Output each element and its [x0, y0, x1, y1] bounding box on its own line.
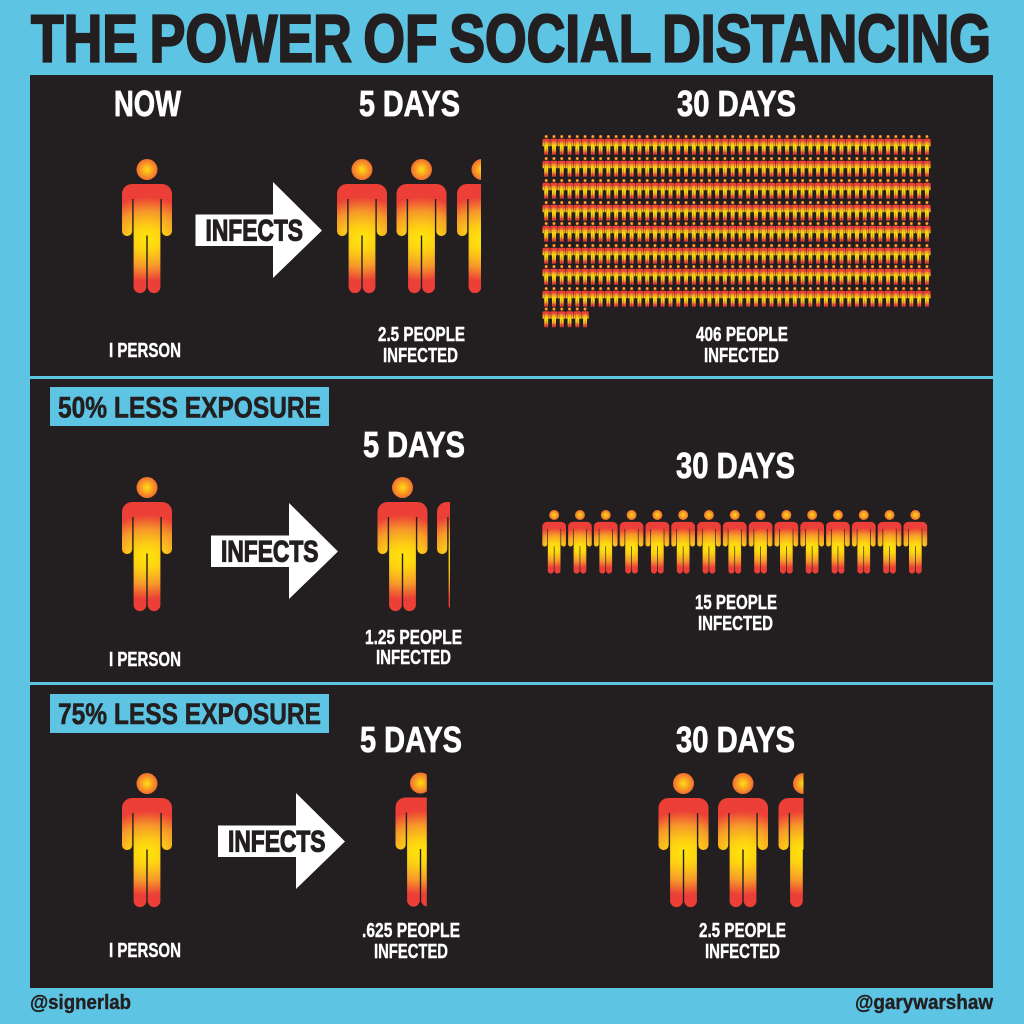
label: 2.5 people infected: INFECTED — [383, 345, 458, 367]
label: 2.5 people infected: 2.5 PEOPLE — [699, 920, 786, 942]
label: 15 people infected: 15 PEOPLE — [695, 592, 777, 614]
credit: garywarshaw: @garywarshaw — [855, 992, 993, 1014]
arrow: infects: INFECTS — [228, 826, 326, 858]
pictogram: 406 people — [542, 135, 931, 327]
icon: .625 person — [396, 772, 427, 907]
icons: 2.5 people — [658, 773, 804, 908]
credit: signerlab: @signerlab — [30, 992, 131, 1014]
heading: 30 days: 30 DAYS — [676, 719, 795, 760]
heading: 5 days: 5 DAYS — [363, 424, 465, 465]
label: 1.25 people infected: 1.25 PEOPLE — [365, 627, 462, 649]
label: 406 people infected: INFECTED — [704, 345, 779, 367]
icons: 2.5 people — [337, 159, 481, 294]
label: .625 people infected: .625 PEOPLE — [362, 920, 460, 942]
panel: 50% less exposure — [30, 379, 993, 682]
heading: 5 days: 5 DAYS — [360, 719, 462, 760]
heading: 5 days: 5 DAYS — [359, 83, 460, 124]
pictogram: 15 people — [542, 510, 927, 574]
arrow: infects — [218, 793, 345, 889]
label: 1 person: I PERSON — [109, 340, 181, 362]
icons: 1.25 people — [378, 477, 450, 612]
label: .625 people infected: INFECTED — [374, 941, 448, 963]
label: 2.5 people infected: INFECTED — [705, 941, 780, 963]
label: 2.5 people infected — [699, 920, 786, 963]
arrow: infects: INFECTS — [206, 214, 303, 248]
label: 406 people infected — [696, 324, 788, 367]
heading: 30 days: 30 DAYS — [677, 83, 796, 124]
icon: person — [122, 477, 172, 611]
heading: now: NOW — [114, 83, 181, 124]
icon: person — [122, 159, 172, 293]
label: 15 people infected — [695, 592, 777, 635]
label: 2.5 people infected — [378, 324, 465, 367]
heading: 30 days: 30 DAYS — [676, 445, 795, 486]
label: 1.25 people infected — [365, 627, 462, 669]
label: 406 people infected: 406 PEOPLE — [696, 324, 788, 346]
label: 1 person: I PERSON — [109, 649, 181, 671]
arrow: infects — [196, 182, 322, 278]
label: .625 people infected — [362, 920, 460, 963]
panel: 75% less exposure — [30, 685, 993, 988]
badge: 50% less exposure: 50% LESS EXPOSURE — [58, 392, 321, 424]
label: 1.25 people infected: INFECTED — [376, 647, 451, 669]
label: 2.5 people infected: 2.5 PEOPLE — [378, 324, 465, 346]
panel: no distancing — [30, 75, 993, 376]
arrow: infects — [211, 503, 338, 599]
label: 1 person: I PERSON — [109, 940, 181, 962]
label: 15 people infected: INFECTED — [698, 613, 773, 635]
icon: person — [122, 773, 172, 907]
badge: 75% less exposure: 75% LESS EXPOSURE — [58, 698, 321, 731]
arrow: infects: INFECTS — [221, 536, 318, 568]
